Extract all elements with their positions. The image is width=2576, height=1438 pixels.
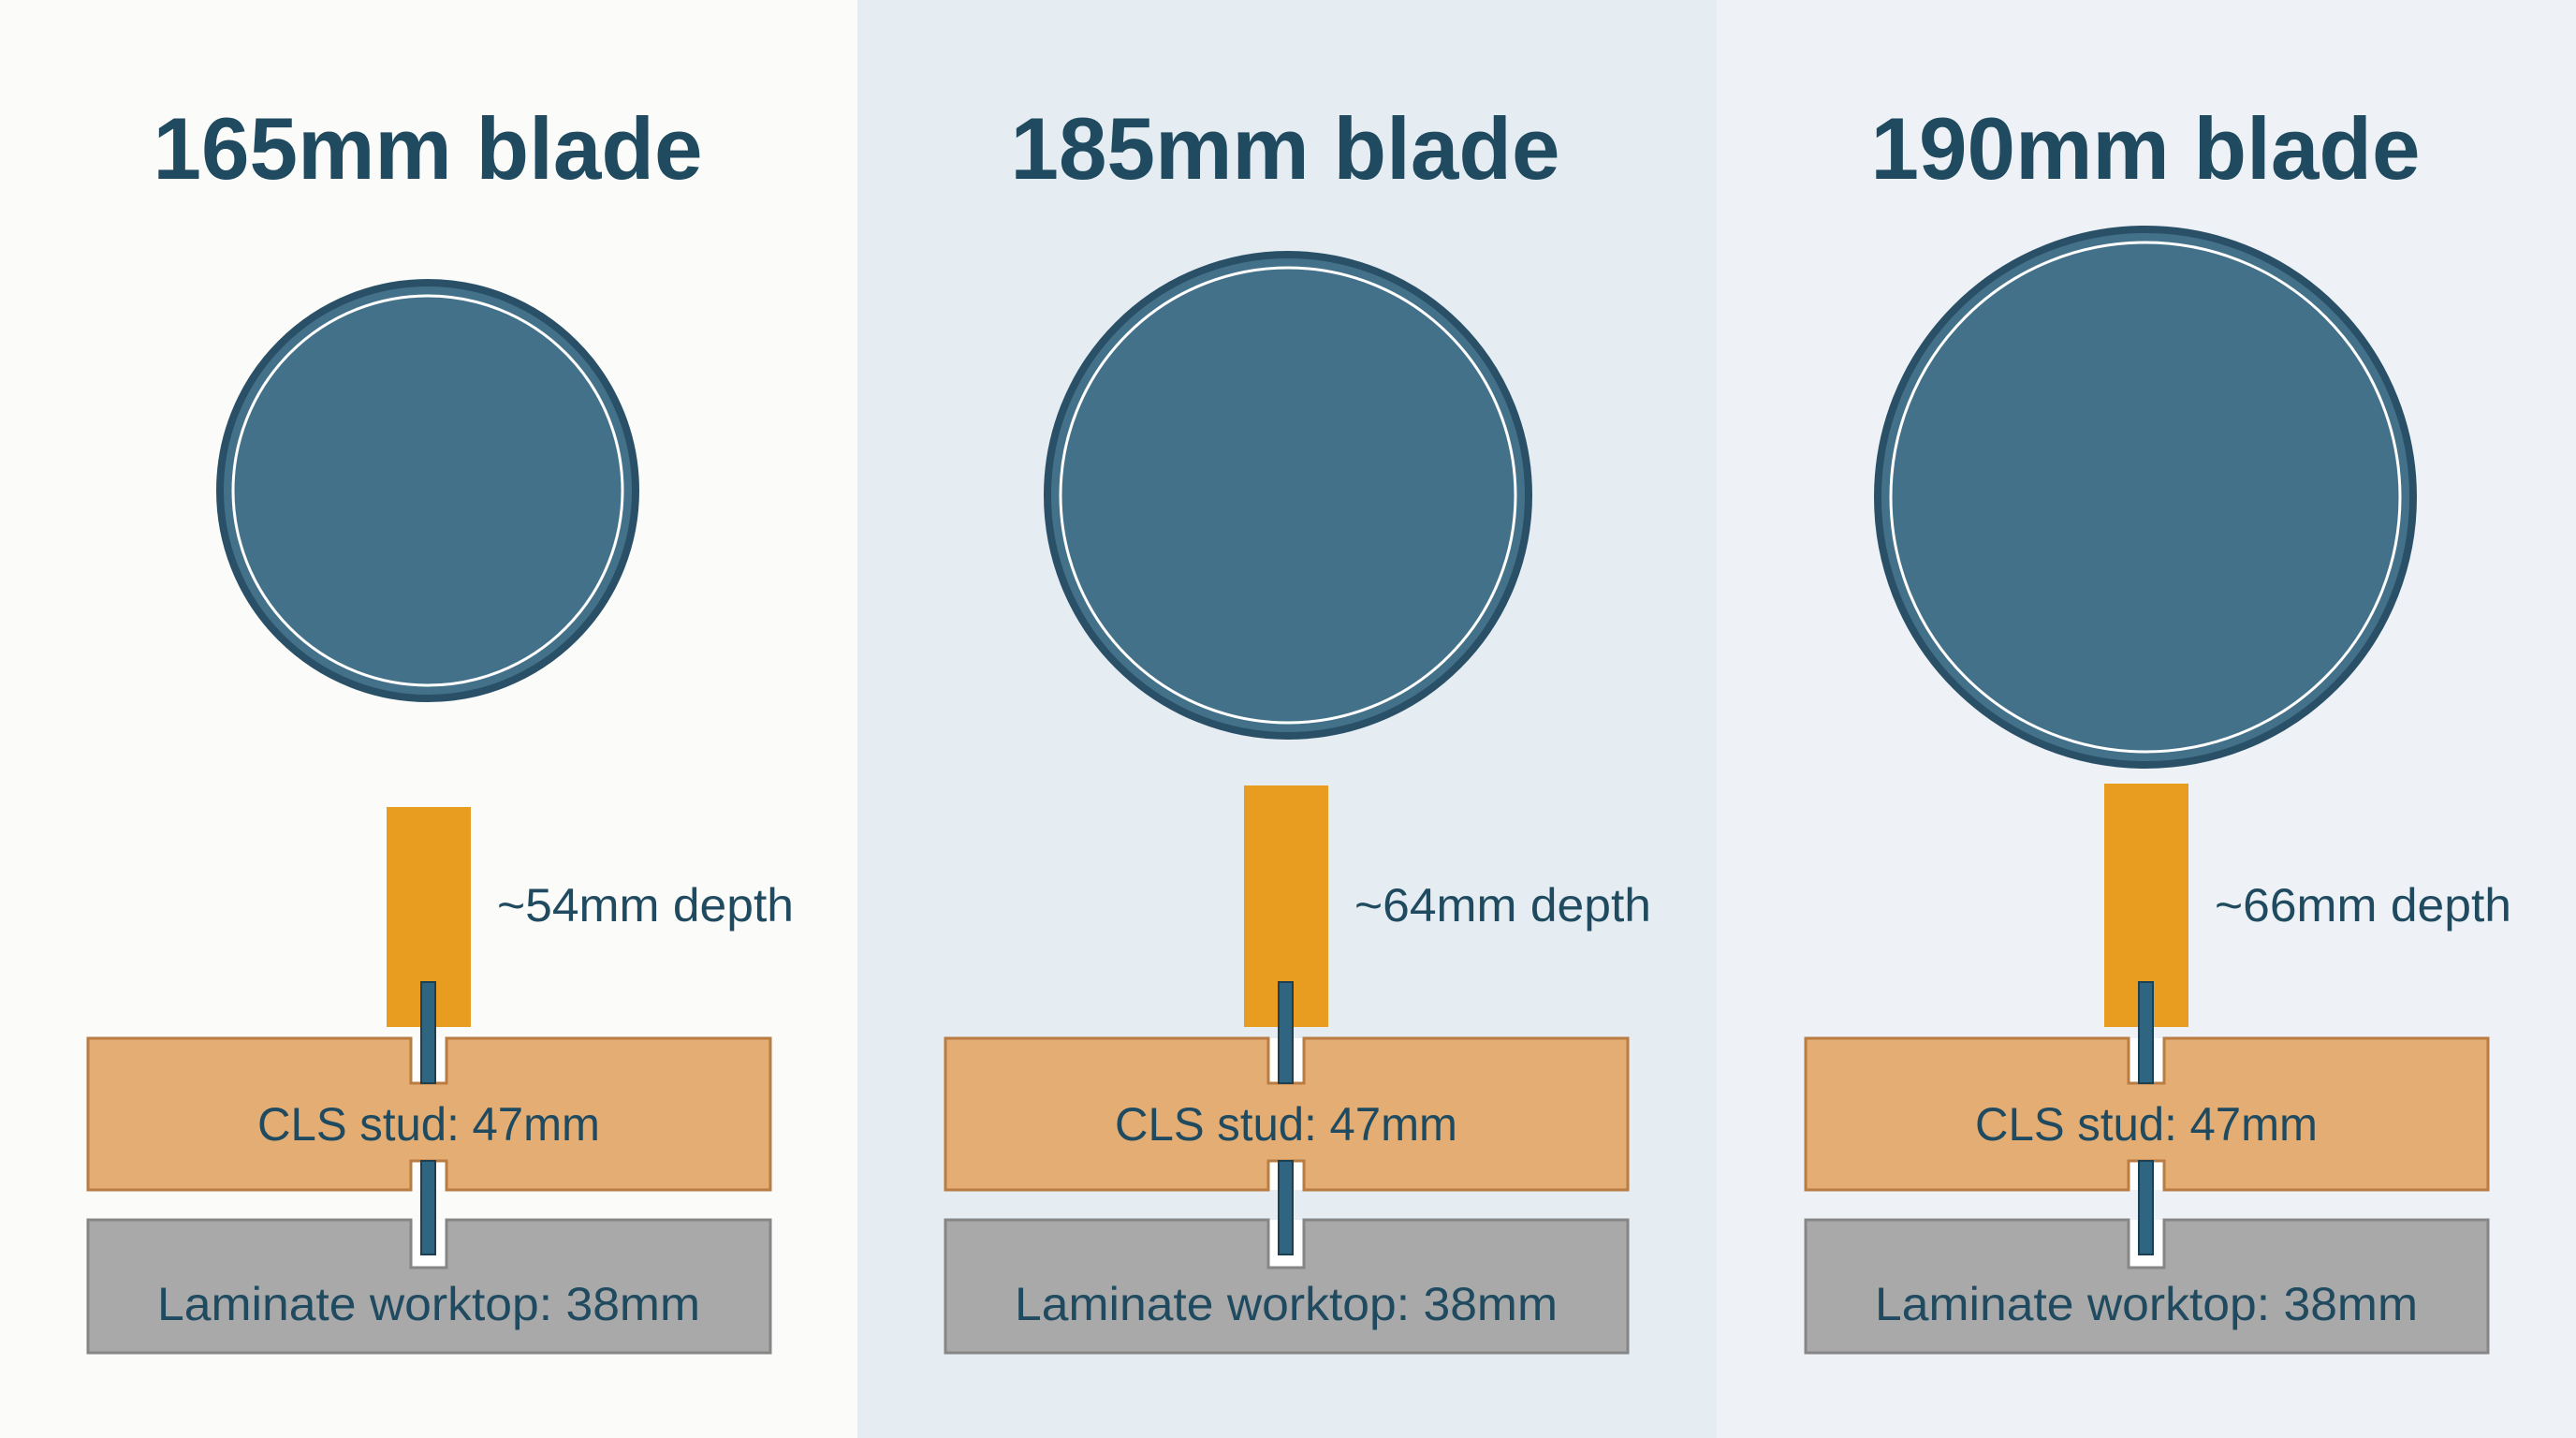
laminate worktop block bbox=[1806, 1220, 2488, 1353]
laminate worktop block: Laminate worktop: 38mm bbox=[157, 1278, 700, 1330]
CLS stud block: CLS stud: 47mm bbox=[257, 1098, 600, 1151]
depth label: ~64mm depth bbox=[1354, 879, 1651, 932]
laminate worktop block: Laminate worktop: 38mm bbox=[1015, 1278, 1558, 1330]
depth bar bbox=[2104, 784, 2188, 1027]
CLS stud block: CLS stud: 47mm bbox=[1115, 1098, 1457, 1151]
icon: blade circle 185mm bbox=[1047, 255, 1529, 736]
CLS stud block bbox=[88, 1038, 770, 1190]
title: 190mm blade: 190mm blade bbox=[1870, 99, 2421, 198]
panel: 165mm blade bbox=[88, 99, 794, 1353]
laminate worktop block bbox=[88, 1220, 770, 1353]
title: 165mm blade: 165mm blade bbox=[154, 99, 702, 198]
icon: blade circle 190mm bbox=[1878, 229, 2413, 765]
laminate worktop block: Laminate worktop: 38mm bbox=[1875, 1278, 2418, 1330]
depth label: ~54mm depth bbox=[497, 879, 794, 932]
CLS stud block bbox=[1806, 1038, 2488, 1190]
depth label: ~66mm depth bbox=[2215, 879, 2511, 932]
depth bar bbox=[387, 807, 471, 1027]
laminate worktop block bbox=[945, 1220, 1628, 1353]
title: 185mm blade: 185mm blade bbox=[1011, 99, 1559, 198]
panel: 185mm blade bbox=[945, 99, 1651, 1353]
depth bar bbox=[1244, 785, 1328, 1027]
icon: blade circle 165mm bbox=[220, 283, 636, 698]
blade cut line bbox=[421, 982, 435, 1255]
panel: 190mm blade bbox=[1806, 99, 2511, 1353]
blade cut line bbox=[2139, 982, 2153, 1255]
CLS stud block: CLS stud: 47mm bbox=[1975, 1098, 2318, 1151]
blade cut line bbox=[1279, 982, 1293, 1255]
CLS stud block bbox=[945, 1038, 1628, 1190]
